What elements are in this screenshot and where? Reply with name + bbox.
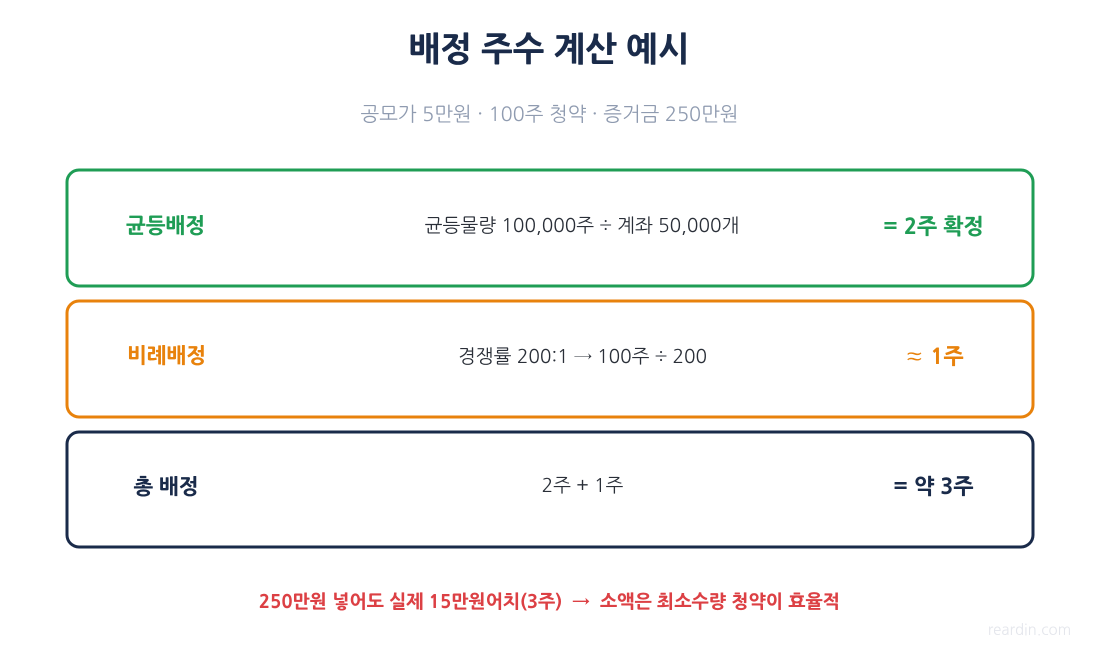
- label: proportional allocation: 비례배정: [127, 344, 206, 367]
- panel: total allocation: [67, 432, 1033, 547]
- formula: total allocation: 2주 + 1주: [542, 476, 624, 495]
- result: total allocation: = 약 3주: [893, 475, 974, 498]
- label: equal allocation: 균등배정: [126, 214, 205, 237]
- formula: proportional allocation: 경쟁률 200:1 → 100주 ÷ 200: [458, 347, 707, 366]
- subtitle: 공모가 5만원 · 100주 청약 · 증거금 250만원: [361, 104, 738, 124]
- panel: proportional allocation: [67, 301, 1033, 417]
- watermark: reardin.com: [988, 623, 1071, 638]
- result: equal allocation: = 2주 확정: [883, 215, 984, 238]
- result: proportional allocation: ≈ 1주: [904, 346, 964, 368]
- callout: 250만원 넣어도 실제 15만원어치(3주) → 소액은 최소수량 청약이 효율적: [259, 591, 840, 611]
- panel: equal allocation: [67, 170, 1033, 286]
- title: 배정 주수 계산 예시: [409, 32, 689, 66]
- formula: equal allocation: 균등물량 100,000주 ÷ 계좌 50,000개: [425, 216, 739, 235]
- label: total allocation: 총 배정: [133, 475, 199, 498]
